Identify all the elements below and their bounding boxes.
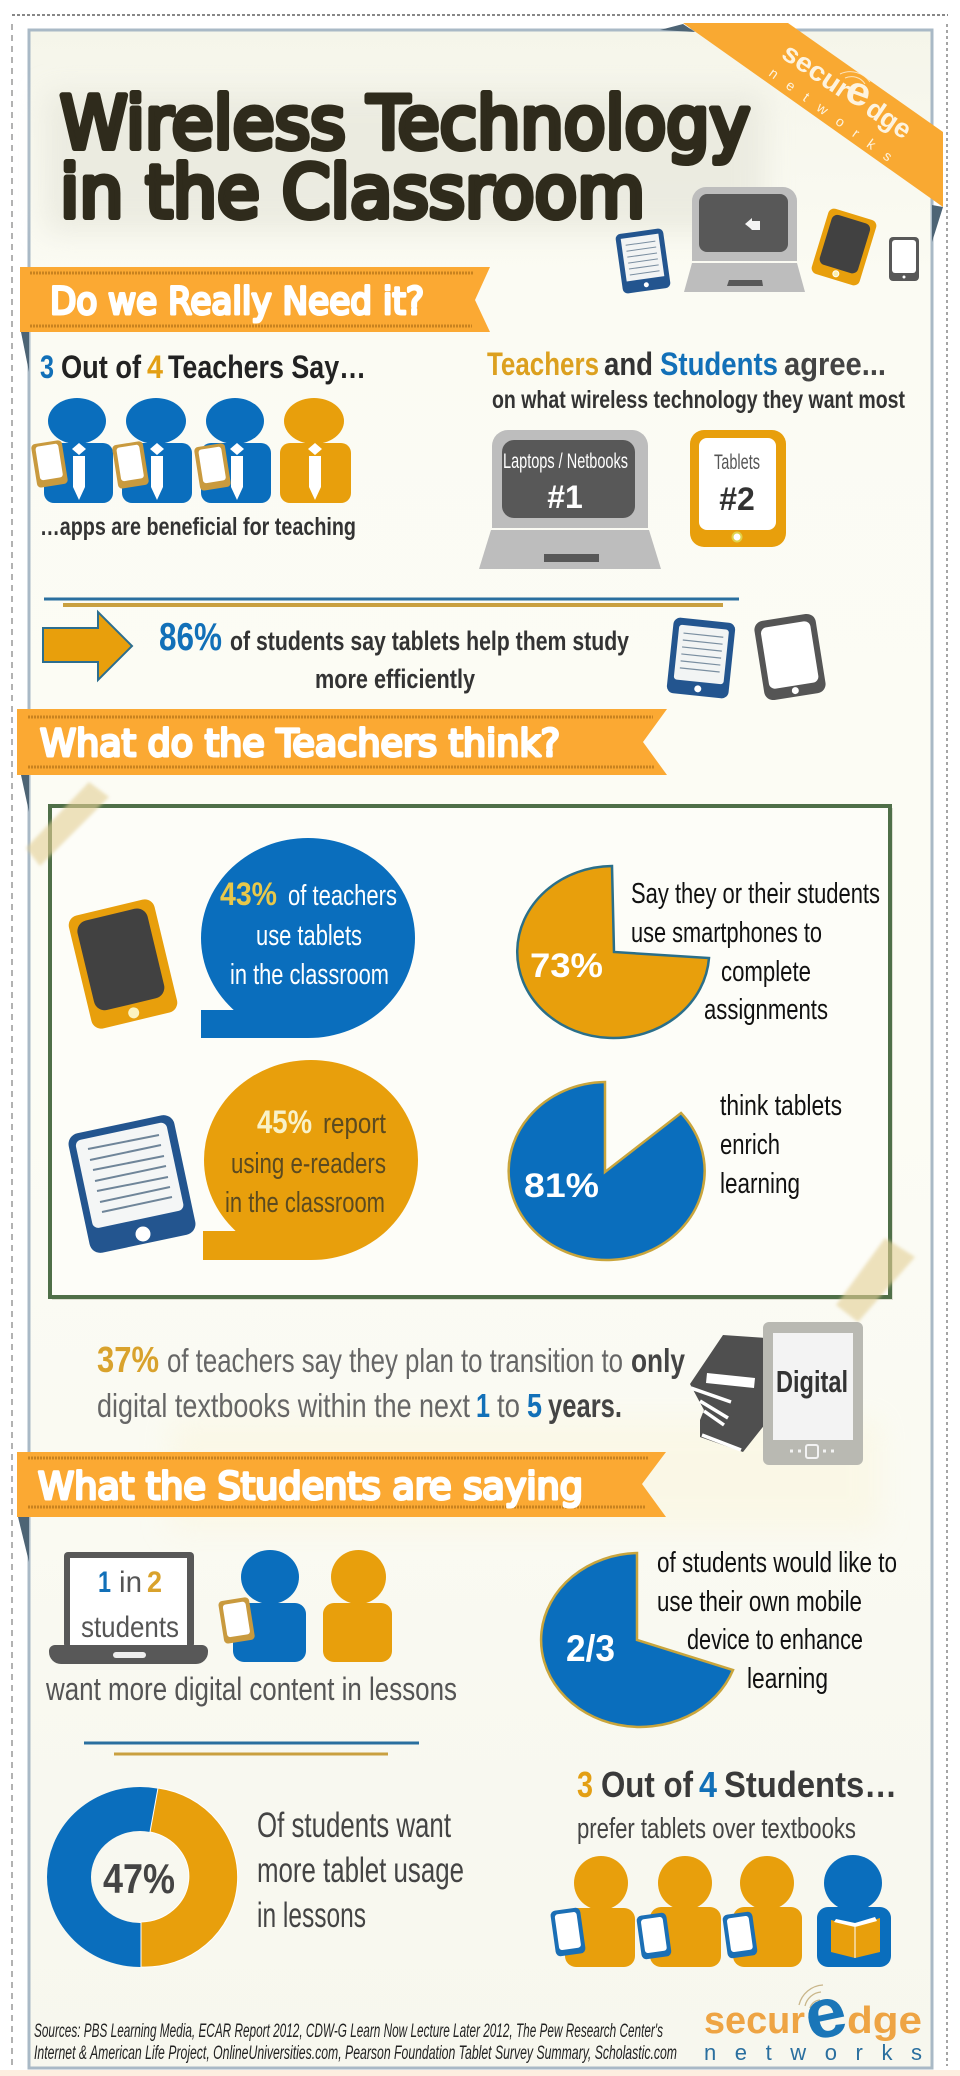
text: 3 out of 4 teachers say: 3 (40, 349, 54, 385)
icon: header tablet (810, 207, 878, 287)
text: 3 out of 4 students: 4 (699, 1764, 717, 1805)
icon: digital reader: Digital (776, 1364, 848, 1399)
title (60, 81, 750, 234)
text: more tablet usage: Of students want (257, 1806, 451, 1845)
donut chart: 47 percent: 47% (103, 1855, 175, 1902)
icon: orange tablet (67, 897, 179, 1031)
text: more tablet usage: more tablet usage (257, 1851, 464, 1890)
icon: teacher 1 (31, 398, 113, 503)
icon: student with tablet 3 (722, 1856, 802, 1967)
icon: header e-reader (615, 228, 671, 294)
icon: laptop 1 in 2 students: students (81, 1611, 179, 1644)
callout: 43 percent of teachers (201, 838, 415, 1038)
callout: 45 percent report: report (323, 1108, 386, 1140)
text: 37 percent digital textbooks: only (631, 1342, 686, 1379)
text: apps are beneficial: …apps are beneficial for teaching (40, 513, 356, 541)
icon: teacher 4 (280, 398, 351, 503)
text: teachers and students agree (487, 346, 906, 414)
pie chart: 81 percent (509, 1082, 705, 1260)
text: teachers and students agree: Teachers (487, 346, 599, 382)
pie chart: two thirds: 2/3 (566, 1628, 615, 1669)
icon: tablet rank 2: Tablets (714, 451, 760, 474)
icon: laptop 1 in 2 students: 1 (98, 1566, 111, 1599)
icon: tablet rank 2 (690, 430, 786, 547)
corner ribbon with logo: dge (861, 93, 917, 145)
text: 3 out of 4 students: Students… (724, 1764, 897, 1805)
title: in the Classroom (60, 150, 645, 234)
callout: 43 percent of teachers: use tablets (256, 920, 362, 952)
text: 3 out of 4 teachers say: Out of (61, 349, 141, 385)
text: enrich learning: learning (720, 1168, 800, 1200)
icon: books and digital reader (690, 1322, 863, 1465)
corner ribbon with logo: networks (766, 64, 895, 164)
logo: securedge networks (704, 1971, 922, 2065)
text: own mobile device: of students would like to (657, 1547, 897, 1579)
text: 3 out of 4 students: prefer tablets over textbooks (577, 1813, 856, 1845)
callout: 43 percent of teachers: in the classroom (230, 959, 389, 991)
text: 37 percent digital textbooks: to (497, 1387, 520, 1424)
text: enrich learning: think tablets (720, 1090, 842, 1122)
text: 37 percent digital textbooks: 37% (97, 1339, 159, 1380)
text: 3 out of 4 teachers say: Teachers Say… (168, 349, 366, 385)
text: 37 percent digital textbooks: 1 (476, 1387, 490, 1424)
pie chart: 73 percent: 73% (530, 947, 603, 985)
icon: e-reader and tablet (666, 613, 827, 701)
heading banner: Do we Really Need it? (20, 267, 490, 372)
text: more tablet usage: in lessons (257, 1896, 366, 1935)
icon: laptop rank 1 (479, 430, 661, 569)
heading banner: What the Students are saying (17, 1452, 666, 1562)
donut chart: 47 percent (69, 1788, 238, 1967)
text: 37 percent digital textbooks (97, 1339, 686, 1424)
text: 3 out of 4 teachers say: 4 (147, 349, 163, 385)
icon: laptop rank 1: Laptops / Netbooks (503, 450, 628, 473)
callout: 43 percent of teachers: of teachers (288, 880, 397, 912)
text: smartphones: use smartphones to (631, 917, 822, 949)
text: 37 percent digital textbooks: years. (548, 1387, 622, 1424)
pie chart: 81 percent: 81% (524, 1167, 599, 1205)
callout: 43 percent of teachers: 43% (220, 876, 277, 912)
text: want more digital content: want more digital content in lessons (45, 1671, 457, 1707)
icon: two students (218, 1550, 392, 1662)
text: own mobile device: learning (747, 1663, 828, 1695)
icon: teacher 3 (194, 398, 271, 503)
callout: 45 percent report: using e-readers (231, 1148, 386, 1180)
corner ribbon with logo: secur (777, 37, 857, 105)
text: smartphones (631, 878, 880, 1026)
icon: laptop 1 in 2 students: 2 (147, 1566, 162, 1599)
text: own mobile device: use their own mobile (657, 1586, 862, 1618)
icon: arrow (43, 612, 132, 680)
icon: tablet rank 2: #2 (719, 481, 755, 517)
text: 3 out of 4 students: Out of (601, 1764, 694, 1805)
text: 3 out of 4 students (577, 1764, 897, 1845)
text: 86 percent of students: 86% (159, 616, 222, 659)
text: smartphones: assignments (704, 994, 828, 1026)
text: own mobile device: device to enhance (687, 1624, 863, 1656)
text: teachers and students agree: Students (660, 346, 778, 382)
text: sources (34, 2021, 677, 2064)
icon: blue e-reader (66, 1113, 198, 1255)
icon: teacher 2 (112, 398, 192, 503)
text: teachers and students agree: agree... (784, 346, 886, 382)
callout: 45 percent report (203, 1060, 418, 1260)
icon: four teachers (31, 398, 351, 503)
corner ribbon with logo: e (840, 67, 878, 117)
icon: student with tablet 2 (636, 1856, 721, 1967)
icon: laptop rank 1: #1 (547, 479, 583, 515)
text: 37 percent digital textbooks: digital textbooks within the next (97, 1387, 470, 1424)
heading banner: Do we Really Need it?: Do we Really Need it? (50, 280, 424, 323)
text: teachers and students agree: and (604, 346, 653, 382)
icon: header laptop (684, 187, 805, 292)
text: 3 out of 4 students: 3 (577, 1764, 593, 1805)
panel: teachers statistics (26, 782, 915, 1322)
logo: securedge networks: secur (704, 2000, 805, 2042)
text: more tablet usage (257, 1806, 464, 1935)
pie chart: 73 percent (517, 866, 709, 1038)
logo: securedge networks: e (797, 1971, 853, 2055)
icon: header phone (889, 237, 919, 281)
icon: student with book (817, 1855, 891, 1967)
icon: digital reader (763, 1322, 863, 1465)
corner ribbon with logo (660, 23, 943, 242)
icon: stack of books (690, 1335, 766, 1452)
text: own mobile device (657, 1547, 897, 1695)
text: 37 percent digital textbooks: 5 (527, 1387, 542, 1424)
text: smartphones: complete (721, 956, 811, 988)
icon: four students (550, 1855, 891, 1967)
text: 86 percent of students: of students say tablets help them study (230, 626, 629, 656)
text: enrich learning (720, 1090, 842, 1200)
icon: student with tablet 1 (550, 1856, 635, 1967)
text: smartphones: Say they or their students (631, 878, 880, 910)
icon: laptop 1 in 2 students: in (119, 1566, 142, 1599)
text: 37 percent digital textbooks: of teachers say they plan to transition to (167, 1342, 623, 1379)
callout: 45 percent report: 45% (257, 1104, 312, 1140)
icon: header devices (615, 187, 919, 294)
logo: securedge networks: dge (847, 2000, 922, 2042)
icon: laptop 1 in 2 students (49, 1552, 208, 1664)
heading banner: What do the Teachers think? (17, 709, 667, 812)
heading banner: What do the Teachers think?: What do the Teachers think? (40, 722, 560, 765)
text: 86 percent of students (159, 616, 629, 694)
title: Wireless Technology (60, 81, 750, 165)
text: 86 percent of students: more efficiently (315, 664, 475, 694)
text: enrich learning: enrich (720, 1129, 780, 1161)
heading banner: What the Students are saying: What the Students are saying (38, 1465, 583, 1508)
logo: securedge networks: networks (704, 2040, 922, 2065)
callout: 45 percent report: in the classroom (225, 1187, 385, 1219)
pie chart: two thirds (541, 1553, 733, 1727)
text: 3 out of 4 teachers say (40, 349, 366, 385)
